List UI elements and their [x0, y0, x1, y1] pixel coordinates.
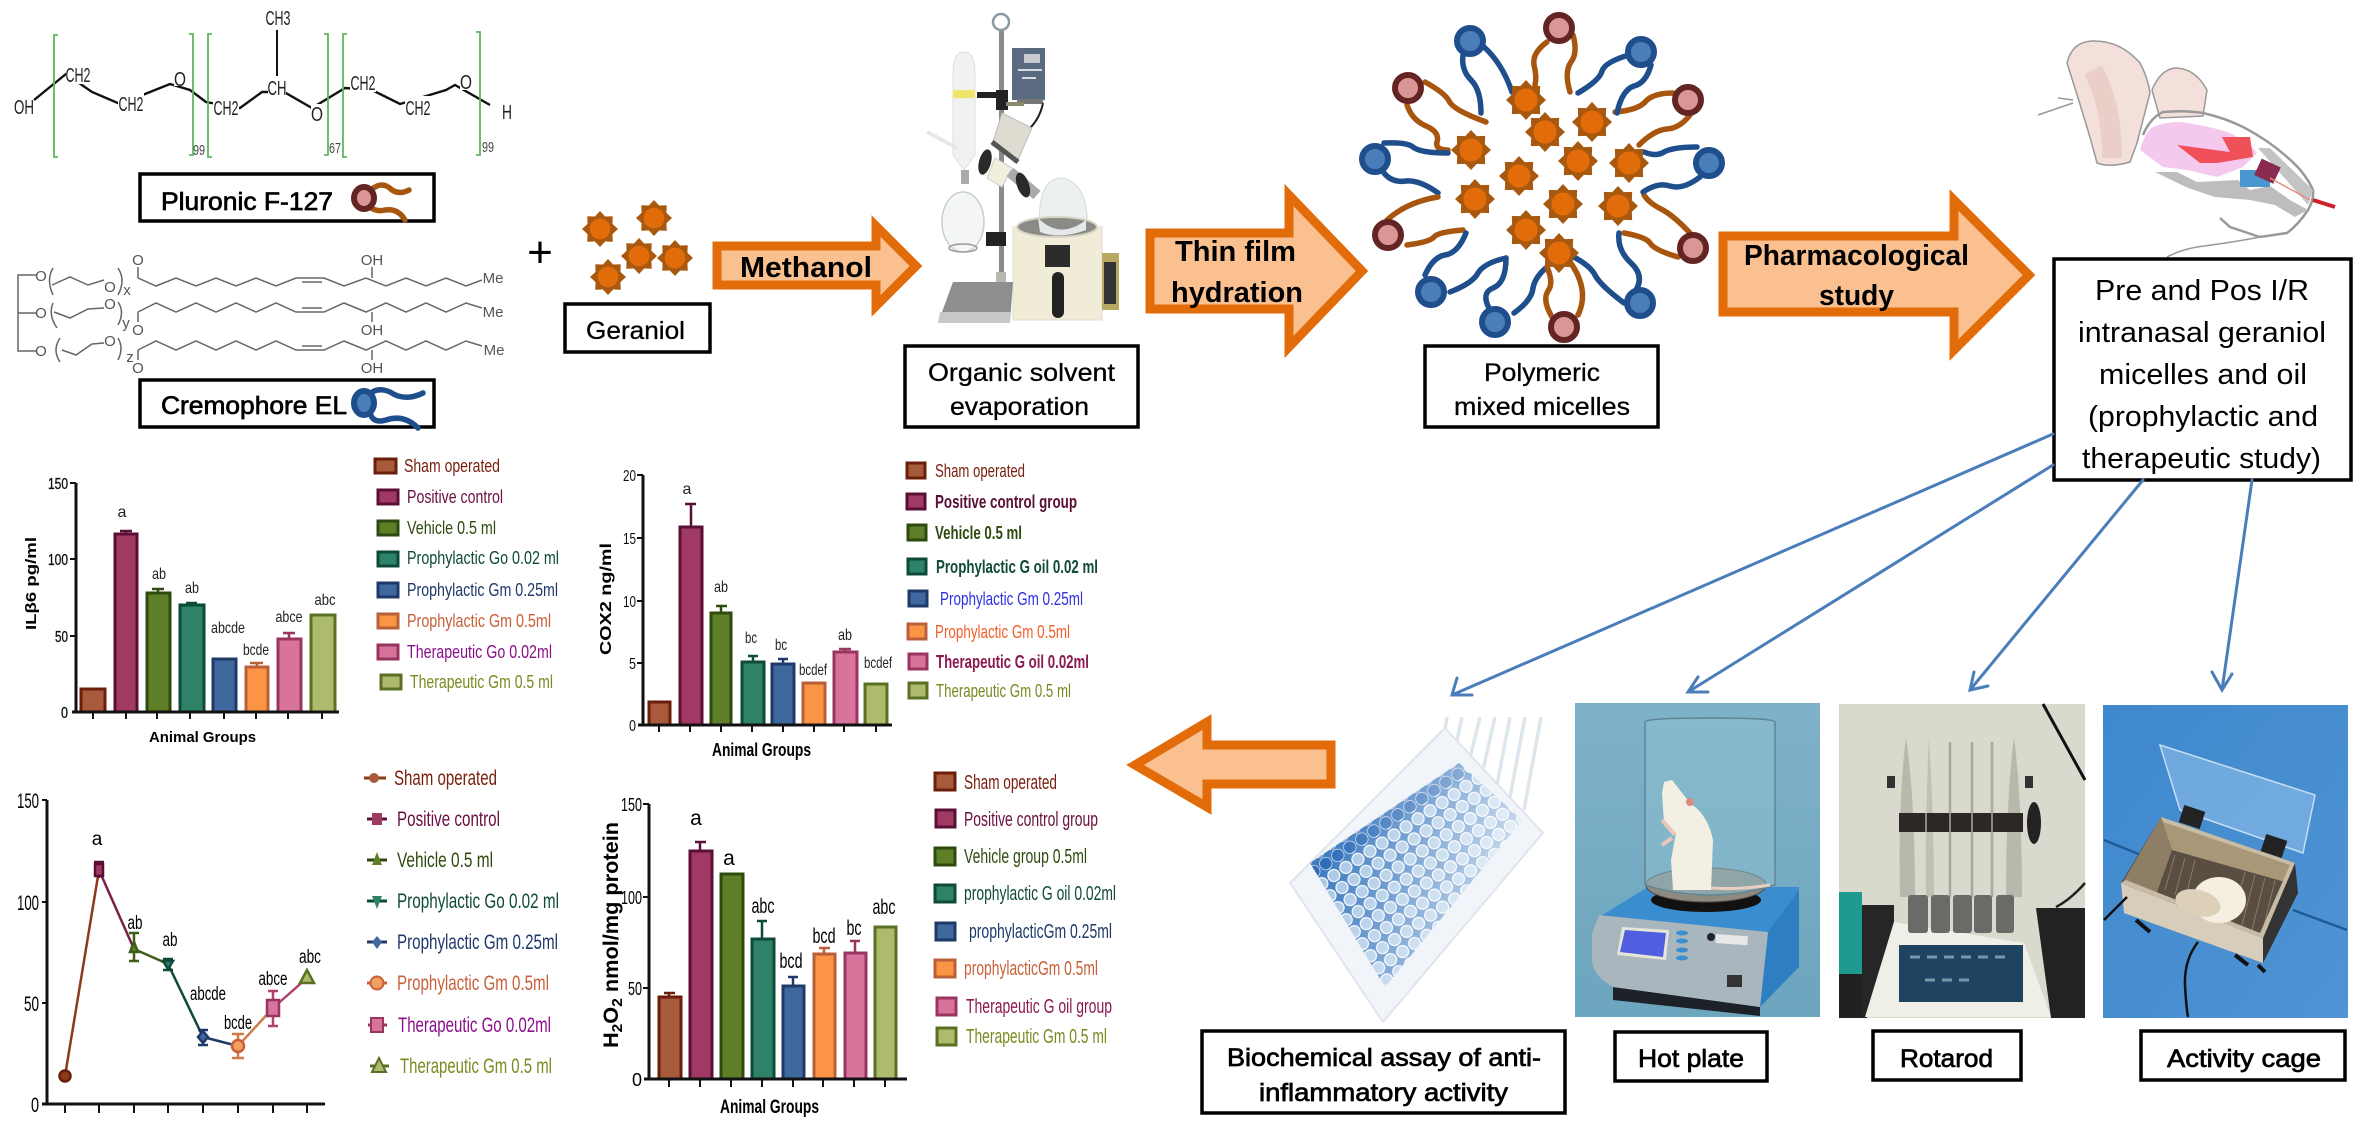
label: Cremophore EL: Cremophore EL [161, 392, 347, 420]
image: 96-well plate [1290, 717, 1543, 1022]
bar chart: IL-beta 6: ab [152, 566, 166, 583]
legend: COX2 chart: Prophylactic G oil 0.02 ml [936, 557, 1098, 577]
label: Organic solvent evaporation: evaporation [950, 393, 1089, 421]
bar chart: IL-beta 6: 0 [61, 705, 68, 722]
legend: H2O2 chart [935, 772, 1116, 1048]
bar chart: H2O2: bcd [812, 925, 836, 948]
legend: IL-beta 6 chart [375, 456, 559, 692]
chemical structure: Pluronic F-127: H [502, 102, 512, 124]
legend: line chart [364, 767, 559, 1078]
label: Pre and Pos I/R study description [2054, 259, 2351, 480]
chemical structure: Pluronic F-127: OH [14, 97, 34, 119]
legend: line chart: Sham operated [394, 767, 497, 790]
image: hot plate apparatus [1575, 703, 1820, 1017]
legend: IL-beta 6 chart: Prophylactic Gm 0.25ml [407, 580, 558, 600]
bar chart: IL-beta 6: Animal Groups [149, 729, 256, 746]
chemical structure: Cremophore EL: OH [361, 322, 383, 339]
chemical structure: Cremophore EL [18, 252, 504, 377]
chemical structure: Cremophore EL: O [104, 296, 116, 313]
image: rotary evaporator [927, 14, 1119, 323]
line chart: 100 [17, 892, 39, 915]
chemical structure: Pluronic F-127: CH2 [214, 98, 238, 120]
label: Organic solvent evaporation [905, 346, 1138, 427]
line chart: a [92, 829, 103, 850]
label: Pre and Pos I/R study description: intranasal geraniol [2078, 317, 2326, 349]
legend: H2O2 chart: prophylactic G oil 0.02ml [964, 883, 1116, 905]
legend: H2O2 chart: Sham operated [964, 772, 1057, 794]
arrow: to biochemical assay [1452, 434, 2053, 695]
arrow: Pharmacological study: Pharmacological [1744, 240, 1969, 272]
bar chart: H2O2: Animal Groups [720, 1097, 819, 1118]
bar chart: COX2: ab [838, 627, 852, 644]
chemical structure: Cremophore EL: Me [483, 304, 503, 321]
y-axis title: O [600, 1007, 623, 1024]
bar chart: H2O2: a [723, 847, 735, 870]
chemical structure: Cremophore EL: OH [361, 252, 383, 269]
line chart [17, 790, 325, 1117]
arrow: Methanol: Methanol [740, 252, 872, 284]
label: Geraniol [565, 304, 710, 352]
bar chart: H2O2: 100 [621, 888, 642, 908]
label: Pluronic F-127 [140, 174, 434, 221]
chemical structure: Pluronic F-127: 99 [193, 142, 205, 159]
bar chart: H2O2: bcd [780, 950, 802, 973]
line chart: ab [162, 930, 178, 951]
legend: IL-beta 6 chart: Therapeutic Gm 0.5 ml [410, 672, 553, 692]
arrow: Methanol [717, 226, 916, 306]
label: Pluronic F-127: Pluronic F-127 [161, 188, 333, 216]
y-axis title: nmol/mg protein [600, 822, 623, 998]
icon: geraniol molecules [582, 200, 693, 295]
legend: COX2 chart: Positive control group [935, 492, 1077, 512]
bar chart: COX2: Animal Groups [712, 740, 811, 760]
image: activity cage [2103, 705, 2348, 1018]
diagram: polymeric mixed micelle [1362, 15, 1722, 340]
bar chart: IL-beta 6: a [118, 504, 127, 521]
label: Pre and Pos I/R study description: therapeutic study) [2082, 443, 2321, 475]
label: Rotarod: Rotarod [1900, 1045, 1993, 1073]
legend: H2O2 chart: Positive control group [964, 809, 1098, 831]
bar chart: IL-beta 6: 50 [55, 629, 68, 646]
chemical structure: Pluronic F-127: CH3 [266, 8, 290, 30]
bars [649, 504, 887, 725]
label: Organic solvent evaporation: Organic solvent [928, 359, 1115, 387]
bar chart: COX2: 20 [623, 468, 636, 485]
bar chart: H2O2: abc [752, 895, 774, 918]
legend: H2O2 chart: Therapeutic G oil group [966, 996, 1112, 1018]
label: Polymeric mixed micelles: Polymeric [1484, 359, 1600, 387]
chemical structure: Cremophore EL: O [35, 343, 47, 360]
legend: H2O2 chart: Vehicle group 0.5ml [964, 846, 1087, 868]
chemical structure: Pluronic F-127: CH2 [118, 94, 144, 116]
plus sign: + [527, 228, 553, 277]
chemical structure: Cremophore EL: O [104, 333, 116, 350]
bar chart: H2O2 [600, 795, 907, 1118]
bar chart: COX2: ab [714, 579, 728, 596]
arrow: Thin film hydration: Thin film [1175, 236, 1296, 268]
chemical structure: Pluronic F-127: CH2 [350, 73, 376, 95]
bars [659, 842, 896, 1079]
chemical structure: Pluronic F-127: CH [268, 78, 286, 100]
legend: H2O2 chart: prophylacticGm 0.25ml [969, 921, 1112, 943]
legend: COX2 chart: Prophylactic Gm 0.5ml [935, 622, 1070, 642]
legend: line chart: Prophylactic Go 0.02 ml [397, 890, 559, 913]
bar chart: IL-beta 6: abc [314, 592, 336, 609]
legend: COX2 chart [907, 461, 1098, 701]
chemical structure: Pluronic F-127: O [174, 69, 186, 91]
bar chart: H2O2: 150 [621, 795, 642, 815]
legend: IL-beta 6 chart: Therapeutic Go 0.02ml [407, 642, 552, 662]
bar chart: IL-beta 6: ab [185, 580, 199, 597]
legend: H2O2 chart: Therapeutic Gm 0.5 ml [966, 1026, 1107, 1048]
bar chart: IL-beta 6: 150 [48, 476, 68, 493]
line chart: 0 [31, 1094, 39, 1117]
bar chart: COX2: 15 [623, 531, 636, 548]
icon: Pluronic unimer [354, 185, 409, 220]
arrow: to hot plate [1688, 465, 2053, 692]
legend: IL-beta 6 chart: Positive control [407, 487, 503, 507]
legend: COX2 chart: Prophylactic Gm 0.25ml [940, 589, 1083, 609]
legend: IL-beta 6 chart: Vehicle 0.5 ml [407, 518, 496, 538]
bars [81, 531, 335, 712]
line chart: abcde [190, 984, 226, 1005]
bar chart: H2O2: bc [846, 917, 862, 940]
bar chart: COX2: 10 [623, 594, 636, 611]
line chart: ab [128, 913, 142, 934]
bar chart: COX2: bc [745, 630, 757, 647]
label: Hot plate: Hot plate [1638, 1045, 1744, 1073]
chemical structure: Cremophore EL: Me [483, 270, 503, 287]
bar chart: COX2: bcdef [799, 662, 827, 679]
y-axis title: H [600, 1033, 623, 1048]
bar chart: COX2: a [683, 481, 692, 498]
label: Cremophore EL [140, 380, 434, 428]
chemical structure: Pluronic F-127: O [460, 72, 472, 94]
label: Polymeric mixed micelles [1425, 346, 1658, 427]
line chart: 50 [24, 993, 39, 1016]
bar chart: COX2: 0 [629, 718, 636, 735]
icon: Cremophore unimer [354, 390, 423, 428]
label: Polymeric mixed micelles: mixed micelles [1454, 393, 1630, 421]
label: Hot plate [1615, 1032, 1767, 1081]
chemical structure: Cremophore EL: x [123, 282, 131, 299]
chemical structure: Cremophore EL: z [126, 349, 134, 366]
chemical structure: Cremophore EL: O [35, 305, 47, 322]
bar chart: IL-beta 6: abce [276, 609, 303, 626]
label: Pre and Pos I/R study description: (prophylactic and [2088, 401, 2318, 433]
legend: line chart: Therapeutic Go 0.02ml [398, 1014, 551, 1037]
label: Pre and Pos I/R study description: micelles and oil [2099, 359, 2307, 391]
label: Biochemical assay of anti-inflammatory activity: inflammatory activity [1259, 1079, 1509, 1107]
chemical structure: Pluronic F-127: CH2 [66, 65, 90, 87]
chemical structure: Cremophore EL: O [132, 360, 144, 377]
chemical structure: Cremophore EL: y [122, 315, 130, 332]
arrow: results back to charts [1135, 722, 1331, 807]
chemical structure: Cremophore EL: O [132, 252, 144, 269]
legend: H2O2 chart: prophylacticGm 0.5ml [964, 958, 1098, 980]
legend: line chart: Therapeutic Gm 0.5 ml [400, 1055, 552, 1078]
arrow: Thin film hydration: hydration [1171, 277, 1303, 309]
image: rotarod apparatus [1839, 704, 2085, 1018]
label: Biochemical assay of anti-inflammatory activity [1202, 1031, 1565, 1113]
chemical structure: Pluronic F-127: CH2 [406, 98, 430, 120]
y-axis title: 2 [609, 998, 626, 1007]
line chart: bcde [224, 1013, 252, 1034]
legend: COX2 chart: Sham operated [935, 461, 1025, 481]
label: Activity cage: Activity cage [2167, 1045, 2321, 1073]
arrow: to activity cage [2212, 480, 2252, 690]
legend: IL-beta 6 chart: Prophylactic Go 0.02 ml [407, 548, 559, 568]
line chart: abc [299, 947, 321, 968]
legend: IL-beta 6 chart: Prophylactic Gm 0.5ml [407, 611, 551, 631]
label: Biochemical assay of anti-inflammatory activity: Biochemical assay of anti- [1227, 1044, 1541, 1072]
data series [60, 862, 314, 1082]
legend: COX2 chart: Therapeutic Gm 0.5 ml [936, 681, 1071, 701]
line chart: abce [258, 969, 288, 990]
bar chart: H2O2: 0 [632, 1070, 642, 1090]
bar chart: COX2: bc [775, 637, 787, 654]
arrow: Thin film hydration [1150, 195, 1362, 347]
bar chart: IL-beta 6: 100 [48, 552, 68, 569]
chemical structure: Cremophore EL: O [35, 268, 47, 285]
legend: COX2 chart: Therapeutic G oil 0.02ml [936, 652, 1089, 672]
legend: line chart: Prophylactic Gm 0.25ml [397, 931, 558, 954]
arrow: Pharmacological study: study [1819, 280, 1894, 312]
bar chart: IL-beta 6: bcde [243, 642, 269, 659]
y-axis title: ILβ6 pg/ml [23, 537, 40, 630]
legend: IL-beta 6 chart: Sham operated [404, 456, 500, 476]
label: Rotarod [1873, 1031, 2021, 1080]
chemical structure: Cremophore EL: O [132, 322, 144, 339]
y-axis title: COX2 ng/ml [598, 543, 615, 655]
chemical structure: Pluronic F-127: O [311, 104, 323, 126]
label: Activity cage [2141, 1031, 2345, 1080]
label: Pre and Pos I/R study description: Pre and Pos I/R [2095, 275, 2309, 307]
chemical structure: Pluronic F-127: 99 [482, 139, 494, 156]
chemical structure: Pluronic F-127: 67 [329, 140, 341, 157]
label: Geraniol: Geraniol [586, 317, 685, 345]
bar chart: COX2: bcdef [864, 655, 892, 672]
chemical structure: Cremophore EL: Me [484, 342, 504, 359]
legend: COX2 chart: Vehicle 0.5 ml [935, 523, 1022, 543]
bar chart: H2O2: a [690, 807, 702, 830]
chemical structure: Pluronic F-127 [14, 8, 512, 159]
bar chart: IL-beta 6: abcde [211, 620, 245, 637]
legend: line chart: Vehicle 0.5 ml [397, 849, 493, 872]
bar chart: COX2: 5 [629, 656, 636, 673]
line chart: 150 [17, 790, 39, 813]
arrow: Pharmacological study [1723, 200, 2029, 350]
bar chart: IL-beta 6 [23, 476, 339, 746]
image: mouse head with intranasal route [2038, 41, 2335, 257]
y-axis title: 2 [609, 1024, 626, 1032]
chemical structure: Cremophore EL: O [104, 279, 116, 296]
bar chart: H2O2: 50 [628, 979, 642, 999]
chemical structure: Cremophore EL: OH [361, 360, 383, 377]
bar chart: COX2 [598, 468, 892, 760]
legend: line chart: Prophylactic Gm 0.5ml [397, 972, 549, 995]
legend: line chart: Positive control [397, 808, 500, 831]
arrow: to rotarod [1970, 480, 2143, 690]
bar chart: H2O2: abc [872, 896, 896, 919]
